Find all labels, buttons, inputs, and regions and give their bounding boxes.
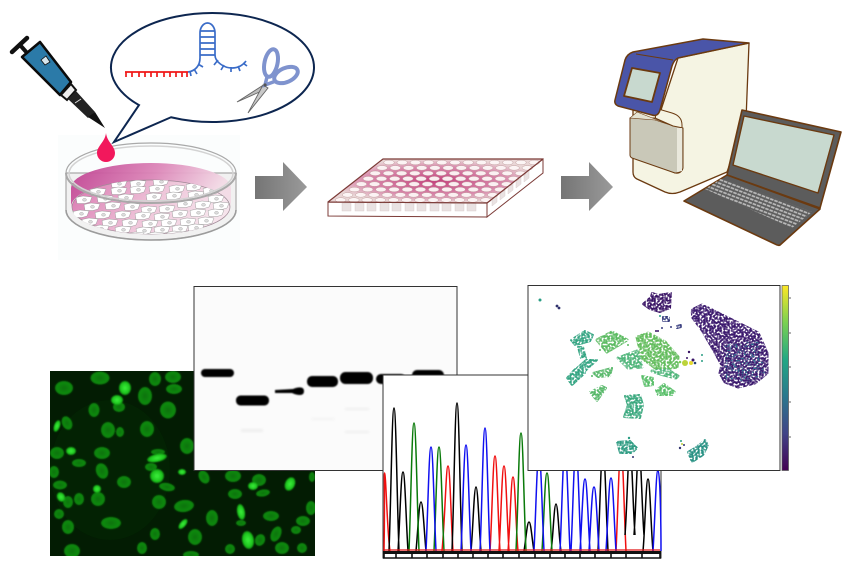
arrow: plate to instrument: [561, 162, 613, 211]
icon: scissors: [237, 48, 300, 113]
dim nuclei: [49, 371, 316, 559]
wells grid: [335, 160, 540, 202]
panel: western blot: [194, 286, 457, 470]
culture dish backdrop: [58, 135, 240, 260]
icon: pipette: [12, 38, 105, 128]
cluster: top dark purple: [643, 293, 681, 328]
panel: fluorescence microscopy nuclei: [49, 371, 316, 559]
icon: pink droplet: [97, 133, 115, 162]
base position ticks: [383, 553, 661, 558]
panel: UMAP scatter plot: [528, 286, 780, 470]
icon: analysis instrument: [615, 39, 749, 194]
callout: speech bubble: [111, 13, 314, 142]
panel: sequencing chromatogram: [383, 375, 661, 558]
colorbar: [782, 286, 791, 470]
bright nuclei: [52, 381, 297, 550]
icon: laptop: [684, 110, 841, 245]
icon: petri dish with cells: [66, 143, 236, 240]
baseline: [384, 549, 660, 551]
cluster: central green: [597, 332, 678, 378]
faint secondary bands: [241, 408, 369, 433]
panel: cell culture transfection illustration: [12, 13, 314, 260]
trace peaks: [384, 403, 661, 551]
guide RNA strand: [125, 23, 247, 77]
cultured cells: [72, 180, 229, 234]
icon: 96-well plate: [328, 159, 543, 217]
arrow: dish to plate: [255, 162, 307, 211]
front wells: [342, 170, 529, 211]
protein bands: [201, 369, 444, 406]
cluster: large dark purple: [692, 305, 767, 387]
cluster: lower islands: [617, 376, 708, 462]
scattered cells: [538, 298, 703, 458]
cluster: left teal strand: [567, 331, 612, 401]
